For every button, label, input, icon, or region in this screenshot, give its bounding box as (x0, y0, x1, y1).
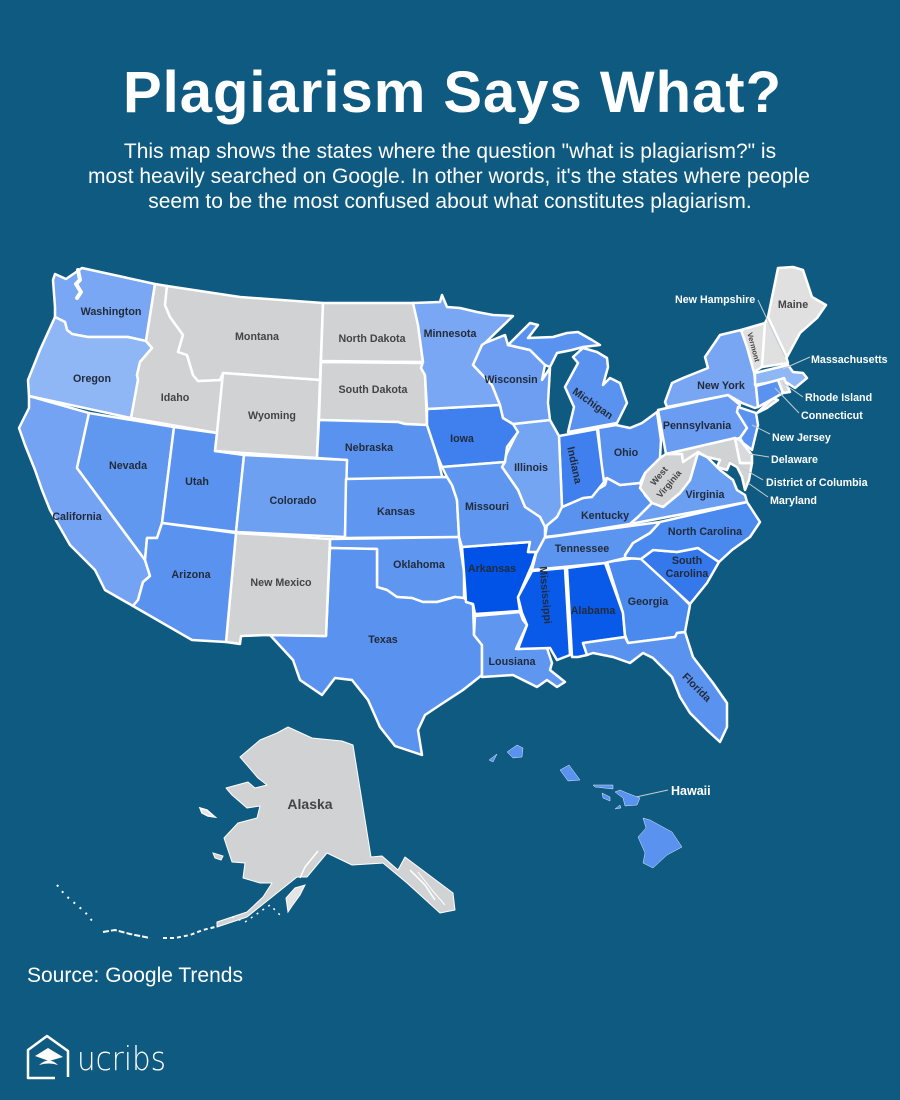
state labels: Arkansas (468, 563, 516, 575)
state labels (52, 299, 808, 705)
state labels: Indiana (564, 446, 584, 486)
state labels: Michigan (570, 386, 615, 422)
external state labels: Connecticut (801, 410, 863, 422)
icon: house with graduation cap (28, 1036, 68, 1078)
state labels: Maine (778, 299, 808, 311)
state labels: Illinois (514, 462, 548, 474)
state labels: Iowa (450, 433, 475, 445)
state labels: Kentucky (581, 510, 629, 522)
state labels: Georgia (628, 596, 669, 608)
state labels: Washington (81, 306, 141, 318)
intro text: This map shows the states where the question "what is plagiarism?" is (124, 140, 776, 163)
state labels: Vermont (745, 331, 762, 363)
external state labels: Delaware (771, 454, 818, 466)
state labels: West (648, 465, 670, 487)
state labels: California (52, 511, 103, 523)
state labels: South Dakota (339, 384, 408, 396)
state labels: Alabama (571, 605, 616, 617)
state labels: South (672, 555, 702, 567)
external state labels (671, 294, 888, 798)
state labels: New York (697, 380, 745, 392)
state labels: Ohio (614, 447, 639, 459)
intro text (88, 140, 810, 213)
state labels: Nebraska (345, 442, 394, 454)
state labels: Oregon (73, 373, 111, 385)
state labels: Wisconsin (484, 374, 538, 386)
state labels: Missouri (465, 501, 509, 513)
external state labels: New Jersey (772, 432, 831, 444)
state labels: Virginia (685, 489, 726, 501)
leader lines (636, 300, 810, 797)
state labels: Montana (235, 331, 280, 343)
state labels: Mississippi (537, 566, 553, 624)
external state labels: Hawaii (671, 784, 711, 798)
map: Alaska (57, 727, 455, 938)
state labels: Minnesota (424, 328, 477, 340)
state labels: Lousiana (489, 656, 537, 668)
state labels: Tennessee (555, 543, 609, 555)
state labels: Utah (185, 476, 209, 488)
title: Plagiarism Says What? (123, 60, 781, 125)
state labels: Colorado (270, 495, 317, 507)
state labels: Carolina (666, 568, 709, 580)
Puget Sound shoreline (76, 270, 81, 298)
state labels: Oklahoma (393, 559, 446, 571)
map: Hawaii (489, 745, 682, 868)
intro text: seem to be the most confused about what constitutes plagiarism. (148, 190, 752, 213)
state labels: Texas (368, 634, 398, 646)
external state labels: Rhode Island (805, 392, 872, 404)
state labels: North Carolina (668, 526, 743, 538)
state labels: Idaho (161, 392, 190, 404)
state labels: North Dakota (338, 333, 407, 345)
state labels: Nevada (109, 460, 148, 472)
external state labels: New Hampshire (675, 294, 755, 306)
source note: Source: Google Trends (27, 964, 243, 987)
state labels: New Mexico (250, 577, 312, 589)
state labels: Wyoming (248, 410, 296, 422)
intro text: most heavily searched on Google. In other words, it's the states where people (88, 165, 810, 188)
state labels: Virginia (655, 467, 684, 500)
external state labels: District of Columbia (766, 477, 869, 489)
map: Alaska: Alaska (287, 796, 333, 812)
logo: ucribs (28, 1036, 166, 1078)
state labels: Arizona (171, 569, 212, 581)
external state labels: Massachusetts (811, 354, 888, 366)
state labels: Pennsylvania (663, 420, 732, 432)
map: contiguous states (19, 267, 826, 755)
state labels: Kansas (377, 506, 415, 518)
logo: ucribs: ucribs (77, 1039, 166, 1078)
external state labels: Maryland (770, 495, 817, 507)
state labels: Florida (679, 671, 714, 705)
